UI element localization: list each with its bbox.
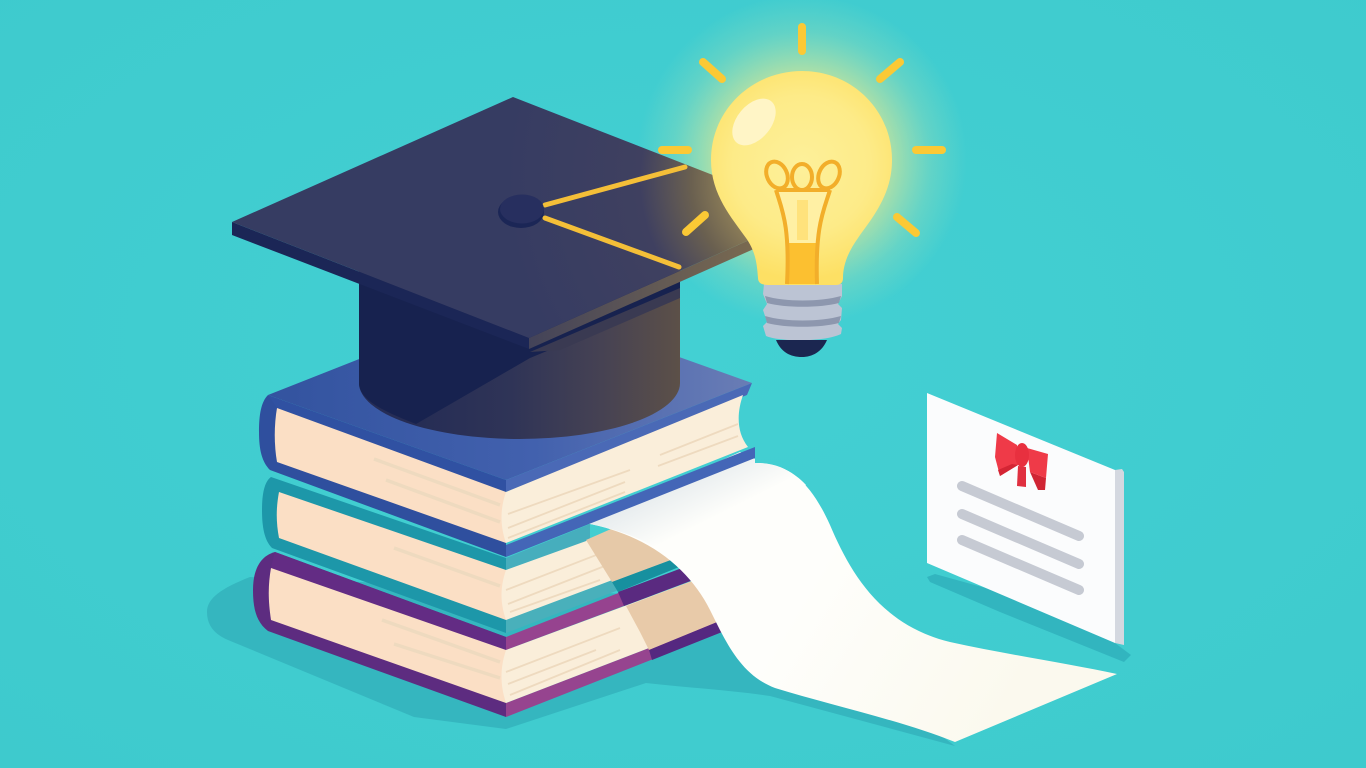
certificate side edge [1115,469,1124,645]
shadow under book stack [207,577,955,746]
purple lower strip in shadow [649,618,727,660]
light bulb glow [637,0,967,325]
board right thickness [529,213,810,349]
book: purple bottom book [253,552,727,717]
light bulb [711,71,892,357]
scroll shadow on books [586,520,727,660]
cap body dark shadow [359,270,680,424]
cap button [498,194,544,228]
teal cover in shadow [612,557,679,592]
certificate face [927,393,1115,643]
bulb highlight [724,90,784,154]
bulb screw base [763,284,842,340]
teal pages right face [502,520,682,620]
filament base [787,243,817,284]
certificate text lines [962,486,1079,590]
blue front left cover edge [268,395,506,492]
book: blue top book [259,298,755,557]
diploma certificate card [927,393,1131,662]
blue pages right face [502,395,748,543]
teal pages left face [277,492,506,620]
screw thread bands [765,296,841,327]
purple spine and top cover [253,552,506,717]
blue pages left face [275,408,506,543]
book: teal middle book [262,477,682,633]
graduation cap [232,97,810,439]
bulb contact tip [776,340,827,357]
teal right top strip [506,524,590,570]
tan shadow on purple book [626,578,727,650]
purple bottom right strip [506,618,727,717]
tassel cords [545,167,685,267]
certificate shadow [927,574,1131,662]
filament glass stem [778,190,830,243]
purple cover in shadow [618,565,693,606]
blue front right cover edge [506,383,752,492]
purple page lines [382,620,620,695]
teal spine and cover [262,477,506,633]
purple pages right face [502,578,727,703]
tan shadow on teal book [586,520,682,582]
bulb glass [711,71,892,285]
light bulb rays [662,27,942,233]
scroll top shaded section [585,452,806,590]
purple right cover strip [506,565,693,650]
filament wires [762,158,844,284]
cap body [359,270,680,439]
blue page lines [374,424,738,538]
blue spine [259,395,506,557]
cap body soft shadow under board right [530,288,680,352]
teal bottom right strip [506,555,679,633]
red ribbon bow [995,433,1048,490]
blue top cover [268,298,752,480]
board top [232,97,810,338]
purple pages left face [269,568,506,703]
blue bottom right strip [506,447,755,557]
teal page lines [394,538,640,612]
purple left top strip [271,552,506,650]
scroll sheet [585,452,1117,742]
board left thickness [232,222,529,349]
unrolled paper scroll [585,452,1117,742]
